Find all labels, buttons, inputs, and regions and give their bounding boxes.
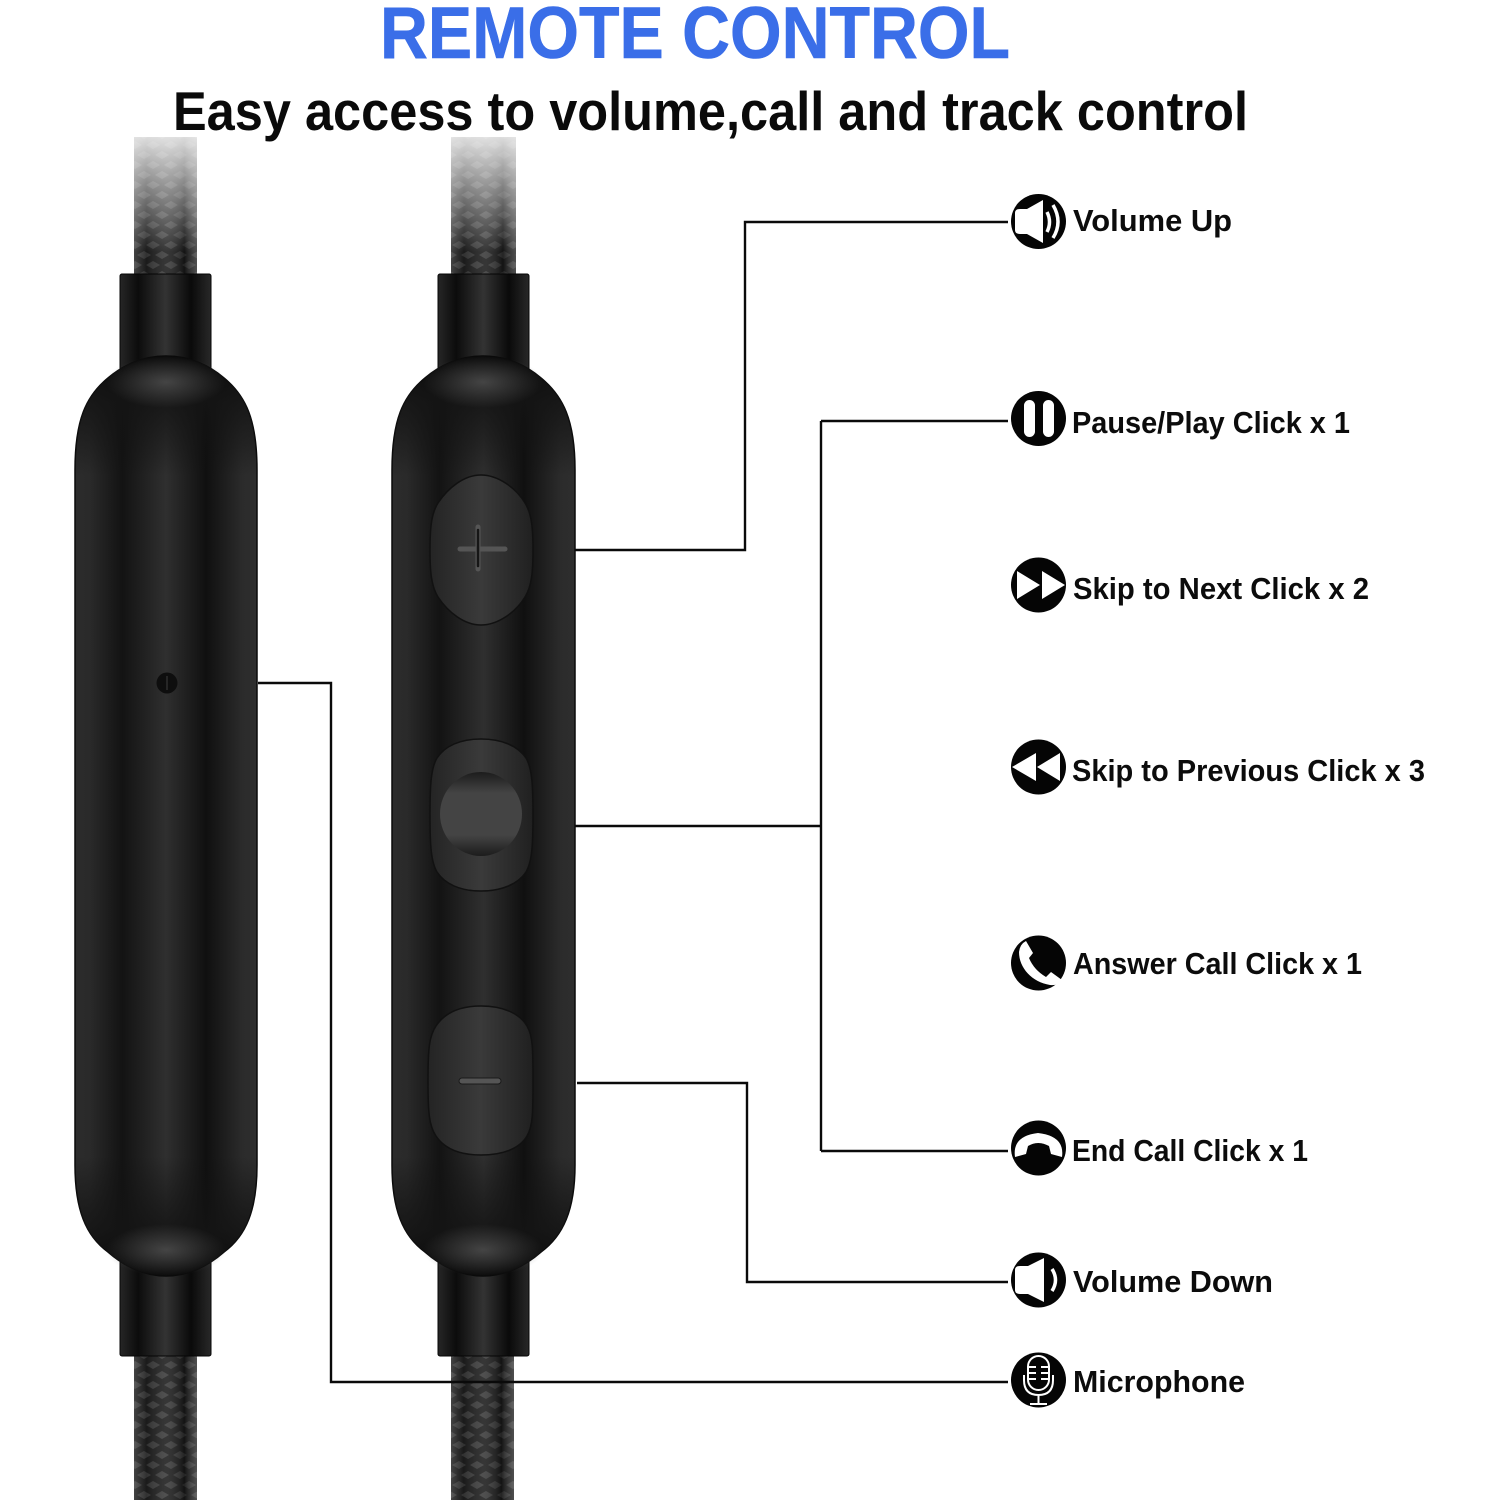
label: Volume Down [1073,1264,1273,1299]
label: Answer Call Click x 1 [1073,946,1362,981]
multi-function button [430,739,533,891]
label: Microphone [1073,1364,1245,1399]
item: end call [1011,1120,1308,1176]
collar top [120,274,211,384]
leader lines [258,222,1008,1382]
minus button [428,1006,533,1155]
label: End Call Click x 1 [1072,1133,1308,1168]
label: Pause/Play Click x 1 [1072,405,1350,440]
cable bottom [451,1350,514,1500]
item: answer call [1011,936,1362,990]
item: pause play [1011,391,1350,446]
remote body front [392,356,575,1276]
remote body back [75,356,257,1276]
cable bottom [134,1350,197,1500]
item: skip next [1011,558,1369,612]
subtitle: Easy access to volume,call and track control [173,80,1248,142]
microphone hole [156,672,178,694]
label: Skip to Previous Click x 3 [1072,753,1425,788]
collar bottom [120,1250,211,1356]
item: volume down [1011,1252,1273,1308]
label: Volume Up [1073,203,1232,238]
label: Skip to Next Click x 2 [1073,571,1369,606]
icon: speaker loud [1011,194,1066,249]
icon: phone [1011,936,1066,990]
cable top [134,137,197,277]
panel: remote front view [392,137,575,1500]
icon: hang up [1011,1120,1066,1176]
cable top [451,137,516,277]
collar top [438,274,529,384]
icon: pause [1011,391,1066,446]
panel: remote back view [75,137,257,1500]
icon: rewind [1011,740,1066,794]
item: volume up [1011,194,1232,249]
collar bottom [438,1250,529,1356]
icon: microphone [1011,1352,1066,1408]
item: microphone [1011,1352,1245,1408]
icon: fast forward [1011,558,1066,612]
item: skip previous [1011,740,1425,794]
icon: speaker soft [1011,1252,1066,1308]
plus button [430,475,533,625]
